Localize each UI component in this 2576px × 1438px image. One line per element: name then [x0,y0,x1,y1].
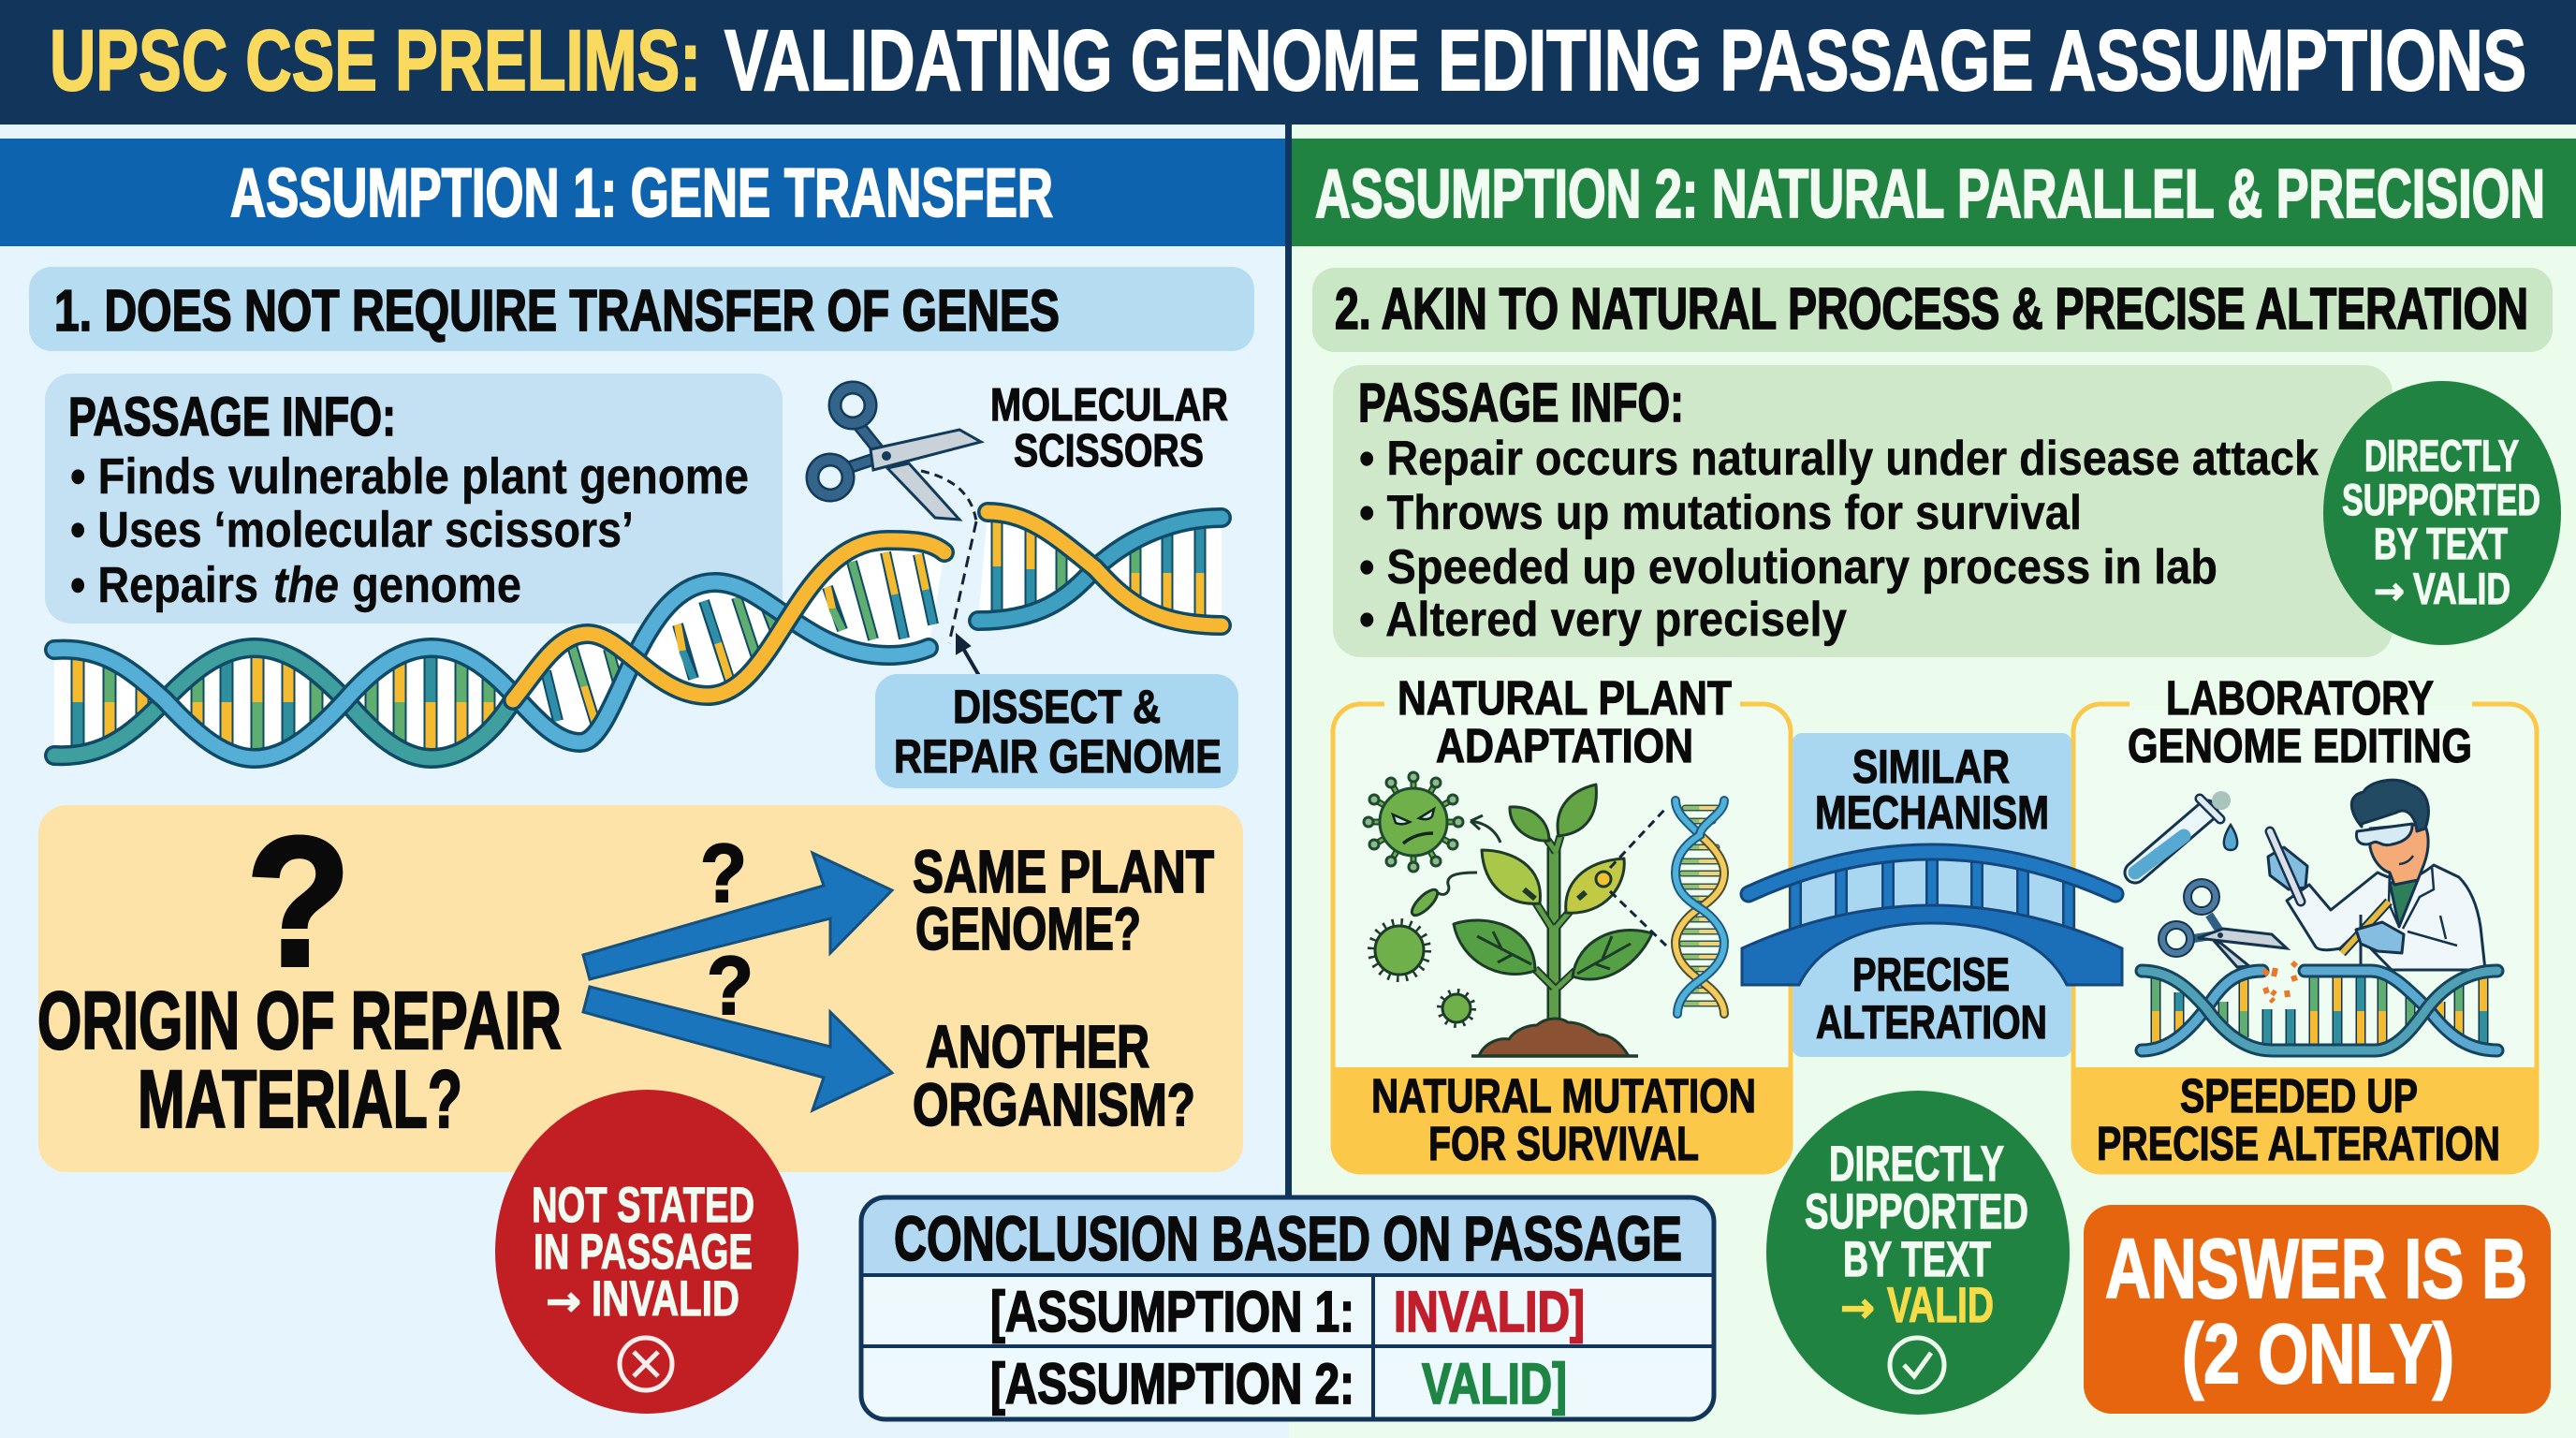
panel: natural plant adaptation: NATURAL PLANT [1398,671,1732,725]
callout: answer is B: (2 ONLY) [2182,1308,2454,1401]
panel: origin of repair material: ANOTHER [926,1013,1149,1080]
panel: passage info right: • Throws up mutations for survival [1359,486,2082,540]
label: molecular scissors: SCISSORS [1014,426,1204,477]
panel: passage info left: genome [352,557,521,613]
panel: similar mechanism [1793,733,2071,1057]
panel: natural plant adaptation: ADAPTATION [1436,719,1693,772]
panel: similar mechanism: ALTERATION [1816,996,2047,1049]
icon: scientist [2268,780,2485,970]
panel: passage info right: • Speeded up evolutionary process in lab [1359,540,2217,594]
title banner [0,0,2576,125]
panel: passage info right: • Altered very precisely [1359,593,1847,647]
panel: origin of repair material: ORIGIN OF REPAIR [37,976,562,1066]
panel: similar mechanism: PRECISE [1852,948,2010,1001]
illustration: cut DNA fragment [978,512,1222,625]
panel: passage info left: • Uses ‘molecular scissors’ [70,502,634,558]
panel: conclusion table: INVALID] [1394,1280,1585,1343]
icon: test tube [2135,791,2237,873]
label: molecular scissors: MOLECULAR [990,380,1228,431]
panel: laboratory genome editing [2073,671,2537,1172]
callout: directly supported top: VALID [2413,564,2510,613]
panel: right background [1289,125,2576,1438]
icon: small virus [1440,991,1473,1025]
cut line and arrow [949,521,982,681]
callout: not stated invalid: → [546,1278,581,1326]
panel: conclusion table: VALID] [1422,1352,1567,1416]
arrow: plant to virus [1471,815,1500,843]
icon: edited DNA [2142,962,2497,1050]
panel: passage info left: • Repairs [70,557,258,613]
callout: answer is B [2084,1205,2551,1414]
panel: conclusion table: CONCLUSION BASED ON PASSAGE [894,1204,1682,1274]
panel: natural plant adaptation: FOR SURVIVAL [1428,1117,1699,1170]
icon: angry virus [1364,772,1463,872]
panel: laboratory genome editing: SPEEDED UP [2180,1069,2418,1123]
subheading: does not require transfer: 1. DOES NOT REQUIRE TRANSFER OF GENES [54,279,1060,344]
callout: directly supported valid: DIRECTLY [1829,1137,2004,1192]
panel: origin of repair material: GENOME? [915,895,1141,962]
callout: directly supported top: DIRECTLY [2364,431,2519,480]
panel: origin of repair material: ? [707,939,754,1032]
arrow: to another organism [583,987,892,1110]
label: dissect and repair genome: REPAIR GENOME [894,730,1222,783]
callout: directly supported valid: BY TEXT [1843,1232,1991,1287]
panel: passage info right: • Repair occurs naturally under disease attack [1359,432,2319,486]
panel: passage info left: • Finds vulnerable plant genome [70,448,749,505]
panel: conclusion table: [ASSUMPTION 2: [990,1352,1354,1416]
icon: spore with tail [1408,873,1477,919]
callout: directly supported top: BY TEXT [2374,519,2508,568]
callout: directly supported top: → [2374,570,2405,613]
icon: bridge [1742,852,2122,985]
panel: origin of repair material: MATERIAL? [138,1054,462,1145]
panel: origin of repair material [37,799,1243,1172]
arrow: to same plant genome [583,853,892,979]
icon: small DNA [1676,800,1724,1014]
panel: origin of repair material: SAME PLANT [913,838,1214,905]
label: molecular scissors [990,380,1228,477]
heading: assumption 1 [0,139,1285,246]
callout: directly supported top [2323,381,2561,645]
panel: origin of repair material: ORGANISM? [913,1071,1195,1138]
title banner: UPSC CSE PRELIMS: [50,13,701,109]
panel: passage info right: PASSAGE INFO: [1358,373,1684,433]
panel: origin of repair material: ? [700,827,747,919]
panel: laboratory genome editing: LABORATORY [2166,671,2434,725]
panel: laboratory genome editing: GENOME EDITING [2128,719,2472,772]
icon: lab scissors [2162,883,2287,967]
panel: conclusion table [861,1197,1714,1419]
panel: natural plant adaptation [1333,671,1791,1172]
heading: assumption 1: ASSUMPTION 1: GENE TRANSFER [230,155,1053,231]
panel: passage info left: PASSAGE INFO: [68,387,396,448]
panel: similar mechanism: MECHANISM [1815,786,2049,839]
icon: spiky virus [1371,922,1427,978]
callout: directly supported valid: → [1840,1284,1875,1332]
heading: assumption 2 [1292,139,2576,246]
panel: similar mechanism: SIMILAR [1852,741,2010,793]
label: dissect and repair genome [875,674,1238,788]
panel: natural plant adaptation: NATURAL MUTATION [1371,1069,1756,1123]
icon: molecular scissors [812,388,981,521]
callout: not stated invalid: NOT STATED [532,1178,754,1233]
panel: conclusion table: [ASSUMPTION 1: [990,1280,1354,1343]
illustration: long DNA helix [54,540,944,768]
panel: left background [0,125,1289,1438]
callout: directly supported valid: SUPPORTED [1805,1184,2028,1240]
callout: directly supported valid [1766,1091,2070,1415]
panel: passage info right [1333,365,2393,657]
big question mark: ? [246,799,351,1005]
callout: directly supported valid: VALID [1887,1278,1994,1333]
callout: not stated invalid: IN PASSAGE [534,1225,753,1280]
callout: not stated invalid [495,1090,798,1414]
dashed zoom lines [1610,808,1666,946]
panel: passage info left [45,374,783,624]
icon: plant [1454,785,1652,1056]
label: dissect and repair genome: DISSECT & [953,681,1161,733]
panel: passage info left: the [273,557,339,613]
callout: not stated invalid: INVALID [592,1271,739,1327]
